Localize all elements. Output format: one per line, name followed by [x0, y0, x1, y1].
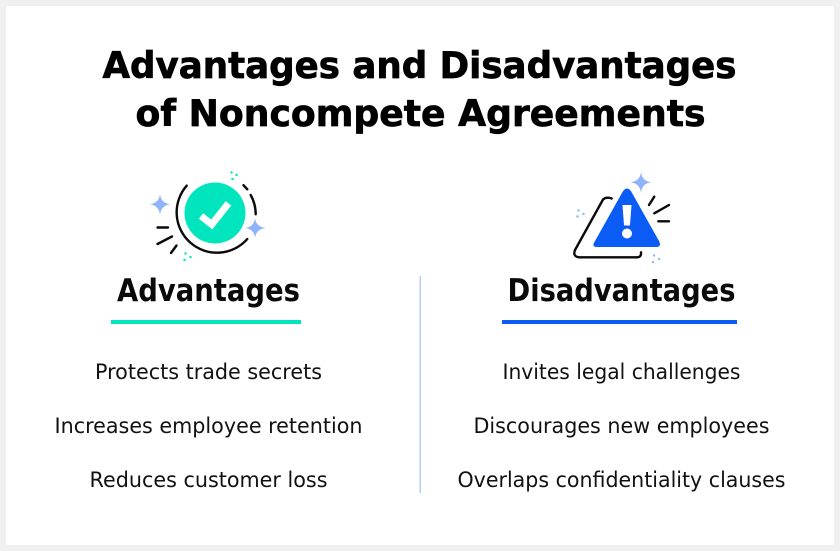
heading: advantages [111, 273, 301, 324]
advantages list [54, 360, 362, 493]
heading: disadvantages [502, 273, 737, 324]
heading: disadvantages: Disadvantages [508, 273, 736, 309]
title: Advantages and Disadvantages [102, 44, 736, 87]
heading: advantages: Advantages [117, 273, 300, 309]
disadvantages list: Overlaps confidentiality clauses [458, 468, 786, 493]
disadvantages list: Discourages new employees [474, 414, 770, 439]
title [102, 44, 736, 135]
icon: warning triangle [574, 172, 669, 263]
advantages list: Increases employee retention [54, 414, 362, 439]
disadvantages list [458, 360, 786, 493]
icon: check mark badge [150, 171, 266, 261]
disadvantages list: Invites legal challenges [502, 360, 740, 385]
center divider [420, 276, 421, 493]
advantages list: Reduces customer loss [90, 468, 328, 493]
advantages list: Protects trade secrets [95, 360, 322, 385]
title: of Noncompete Agreements [136, 92, 706, 135]
